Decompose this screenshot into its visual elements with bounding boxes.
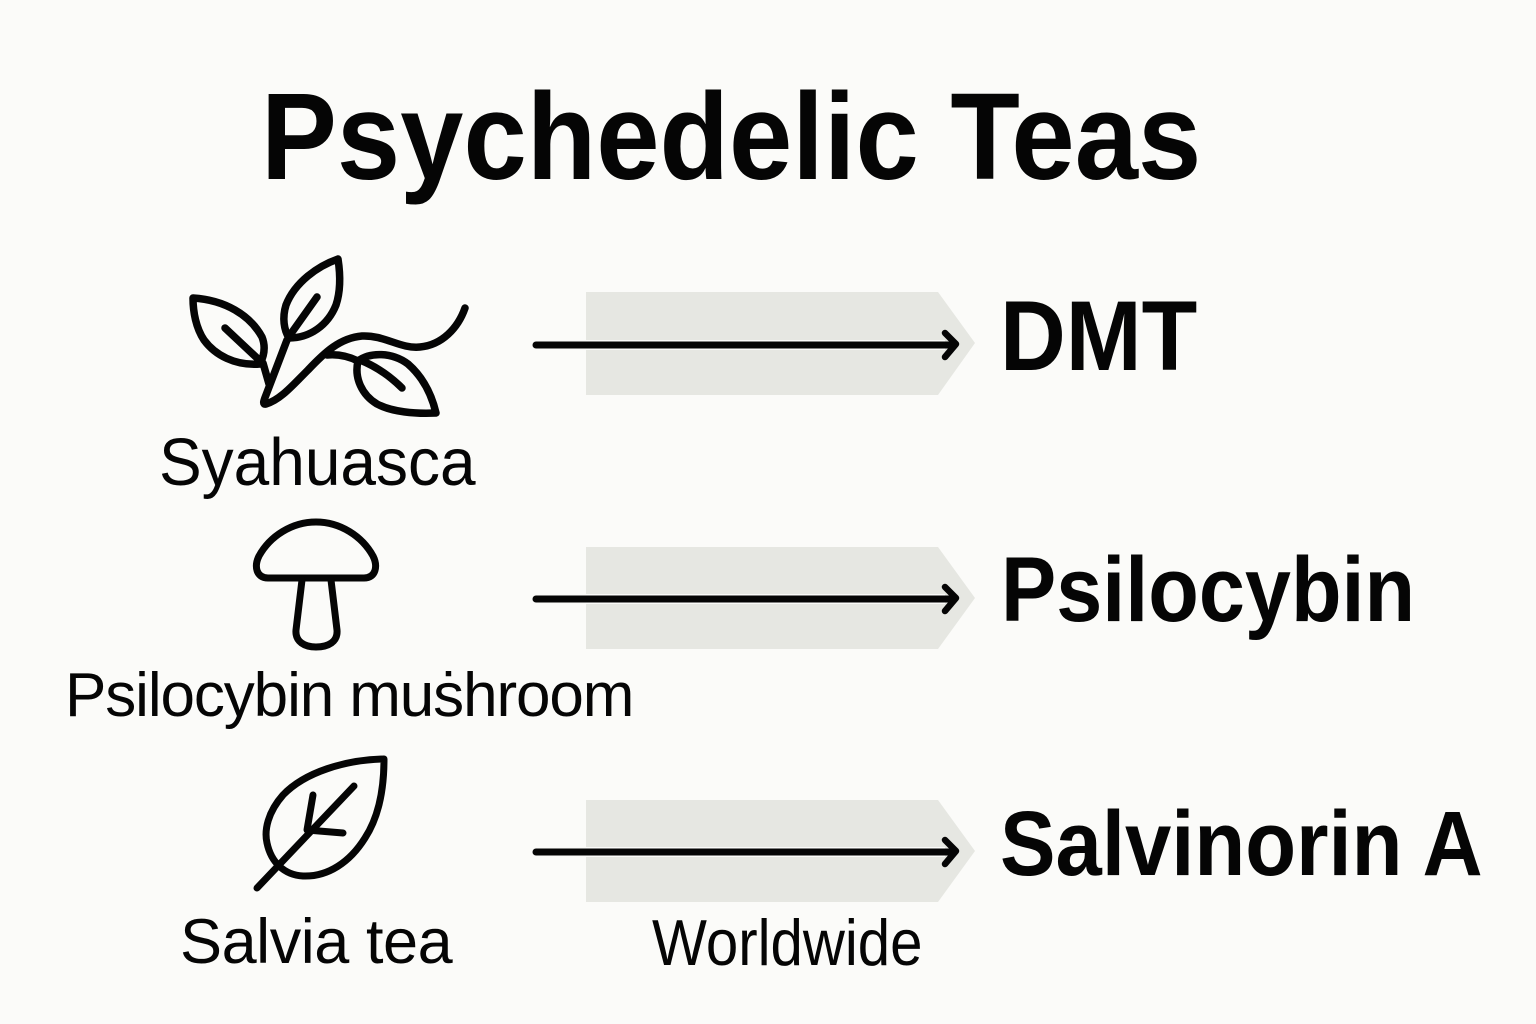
label: Psilocybin mushroom: Psilocybin muṡhroom — [65, 661, 633, 730]
label: Worldwide: Worldwide — [652, 906, 923, 979]
arrow: mushroom to Psilocybin — [532, 547, 975, 649]
arrow: Syahuasca to DMT — [532, 292, 975, 395]
label: Syahuasca: Syahuasca — [159, 425, 476, 500]
icon: salvia leaf — [254, 756, 388, 892]
title: Psychedelic Teas — [261, 69, 1201, 206]
result: Salvinorin A: Salvinorin A — [1000, 793, 1483, 895]
result: DMT: DMT — [1000, 280, 1197, 391]
arrow: salvia to Salvinorin A — [532, 800, 975, 902]
result: Psilocybin: Psilocybin — [1001, 539, 1415, 641]
label: Salvia tea: Salvia tea — [180, 907, 452, 977]
icon: vine with leaves — [189, 255, 469, 417]
icon: mushroom — [252, 518, 380, 650]
